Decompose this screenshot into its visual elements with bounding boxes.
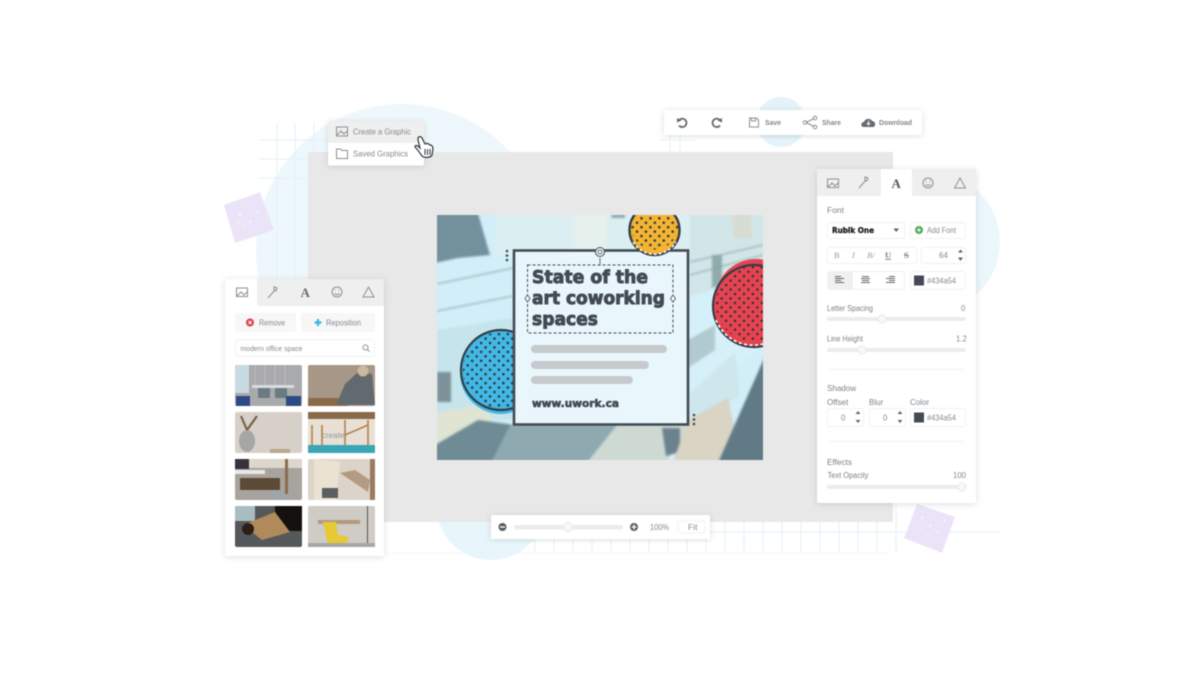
font controls: Rubik One [832,226,874,235]
card title [532,268,665,330]
remove button [235,313,296,332]
text style buttons: 64 [939,251,948,260]
zoom bar: Fit [688,522,698,532]
line height slider: Line Height [827,334,864,344]
effects controls: 100 [953,471,967,480]
icon: cloud download [861,119,875,127]
reposition button: Reposition [326,318,361,328]
line height slider: 1.2 [956,334,967,344]
icon: folder [336,149,348,158]
thumbnail: coffee table [235,506,302,547]
text style buttons: S [904,250,909,260]
icon: hand cursor [415,137,433,157]
text style buttons: B/ [866,250,877,260]
text selection box [525,248,676,333]
top toolbar [664,110,922,135]
text style buttons: I [851,250,856,260]
background grid [259,123,1000,553]
search box [236,340,374,356]
top toolbar: Share [822,118,841,127]
right panel: text settings [817,169,976,503]
shadow controls: 0 [841,414,846,422]
tab bar [817,169,976,196]
thumbnail: handshake [308,459,375,500]
purple sticker right [904,504,955,553]
tab bar [236,279,384,306]
icon: undo [677,118,686,127]
font controls: Add Font [927,226,957,235]
thumbnail: create wall [308,412,375,453]
graphics dropdown menu: Create a Graphic [353,126,412,136]
text colour field [910,272,966,290]
placeholder text bars [531,345,667,384]
design preview [436,214,764,461]
canvas area [308,152,893,522]
tab bar: A [892,176,902,191]
card title: State of the [532,268,648,288]
purple sticker left [224,192,274,243]
letter spacing slider: 0 [961,304,966,313]
top toolbar: Download [879,118,912,127]
shadow controls: 0 [883,414,888,422]
line height slider [827,334,967,354]
card title: art coworking [532,289,665,309]
top toolbar: Save [765,118,781,127]
shadow controls: Blur [869,398,884,407]
graphics dropdown menu [328,121,424,166]
letter spacing slider: Letter Spacing [827,304,873,313]
shadow controls: Shadow [827,383,857,393]
graphics dropdown menu: Saved Graphics [353,148,408,158]
font controls: Font [827,205,845,215]
effects controls: Text Opacity [828,471,869,480]
shadow controls: #434a54 [927,414,957,422]
icon: image [336,127,348,136]
font controls [827,205,966,238]
search box: modern office space [240,344,302,353]
alignment buttons [828,272,904,290]
shadow controls: Offset [827,398,849,407]
thumbnail: vase [235,412,302,453]
card [514,250,688,424]
yellow dotted circle [628,214,682,257]
text style buttons: B [834,250,840,260]
card url: www.uwork.ca [532,398,619,410]
thumbnail: create wall: create [322,431,345,440]
card title: spaces [532,310,598,330]
background decorative circles [256,97,1000,560]
effects controls [827,457,967,491]
tab bar: A [300,285,310,300]
reposition button [301,313,375,332]
element handles [506,250,695,425]
icon: redo [713,118,722,127]
text colour field: #434a54 [927,276,957,286]
remove button: Remove [259,318,285,328]
thumbnail: office lounge [235,365,302,406]
left panel: image library [225,279,384,556]
letter spacing slider [827,304,966,323]
icon: share [803,116,817,129]
zoom bar: 100% [650,522,669,532]
effects controls: Effects [827,457,852,467]
icon: plus [630,523,638,531]
thumbnail: person on laptop [308,365,375,406]
shadow controls [827,383,966,426]
shadow controls: Color [910,398,929,407]
thumbnail: coworking room [235,459,302,500]
icon: minus [498,523,506,531]
blue dotted circle [460,330,542,414]
text style buttons [828,248,966,264]
icon: save [750,118,758,127]
thumbnail: yellow chair [308,506,375,547]
text style buttons: U [885,250,891,260]
zoom bar [491,515,710,539]
office photo [430,210,770,465]
red dotted circle [711,258,764,349]
